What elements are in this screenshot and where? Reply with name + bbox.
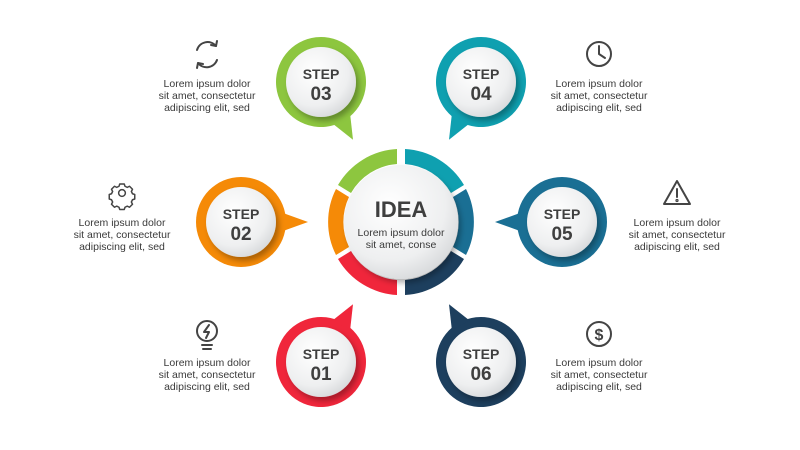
step 03 [260, 21, 392, 162]
text: step 01 [159, 357, 256, 393]
step 06: 06 [470, 364, 492, 385]
text: step 05: sit amet, consectetur [629, 229, 726, 241]
center ring [328, 149, 474, 295]
icon: clock [587, 42, 611, 66]
icon: dollar: $ [595, 327, 604, 344]
step 04 [410, 21, 542, 162]
text: step 04 [551, 78, 648, 114]
icon: dollar [587, 322, 611, 346]
center idea circle: Lorem ipsum dolor [358, 227, 445, 239]
text: step 04: Lorem ipsum dolor [556, 78, 643, 90]
step 05 [495, 177, 607, 267]
text: step 04: adipiscing elit, sed [556, 102, 642, 114]
text: step 06: Lorem ipsum dolor [556, 357, 643, 369]
icon: gear [109, 184, 135, 210]
center idea circle [344, 165, 458, 279]
text: step 02: adipiscing elit, sed [79, 241, 165, 253]
text: step 01: sit amet, consectetur [159, 369, 256, 381]
step 04: 04 [470, 84, 492, 105]
step 01: STEP [303, 346, 339, 362]
step 06 [410, 282, 542, 423]
text: step 03 [159, 78, 256, 114]
step 06: STEP [463, 346, 499, 362]
step 03: 03 [310, 84, 332, 105]
text: step 06: adipiscing elit, sed [556, 381, 642, 393]
icon: warning [664, 181, 690, 204]
text: step 03: adipiscing elit, sed [164, 102, 250, 114]
text: step 05 [629, 217, 726, 253]
step 05: 05 [551, 224, 573, 245]
step 02: 02 [230, 224, 252, 245]
text: step 03: sit amet, consectetur [159, 90, 256, 102]
text: step 05: Lorem ipsum dolor [634, 217, 721, 229]
text: step 01: Lorem ipsum dolor [164, 357, 251, 369]
text: step 04: sit amet, consectetur [551, 90, 648, 102]
center idea circle: IDEA [375, 197, 427, 222]
text: step 06 [551, 357, 648, 393]
text: step 06: sit amet, consectetur [551, 369, 648, 381]
step 02 [196, 177, 308, 267]
text: step 05: adipiscing elit, sed [634, 241, 720, 253]
text: step 03: Lorem ipsum dolor [164, 78, 251, 90]
step 04: STEP [463, 66, 499, 82]
step 02: STEP [223, 206, 259, 222]
icon: refresh [197, 41, 217, 68]
icon: bulb [197, 321, 217, 349]
step 01: 01 [310, 364, 332, 385]
step 05: STEP [544, 206, 580, 222]
text: step 02 [74, 217, 171, 253]
text: step 02: sit amet, consectetur [74, 229, 171, 241]
step 03: STEP [303, 66, 339, 82]
text: step 01: adipiscing elit, sed [164, 381, 250, 393]
step 01 [260, 282, 392, 423]
text: step 02: Lorem ipsum dolor [79, 217, 166, 229]
center idea circle: sit amet, conse [366, 239, 436, 251]
